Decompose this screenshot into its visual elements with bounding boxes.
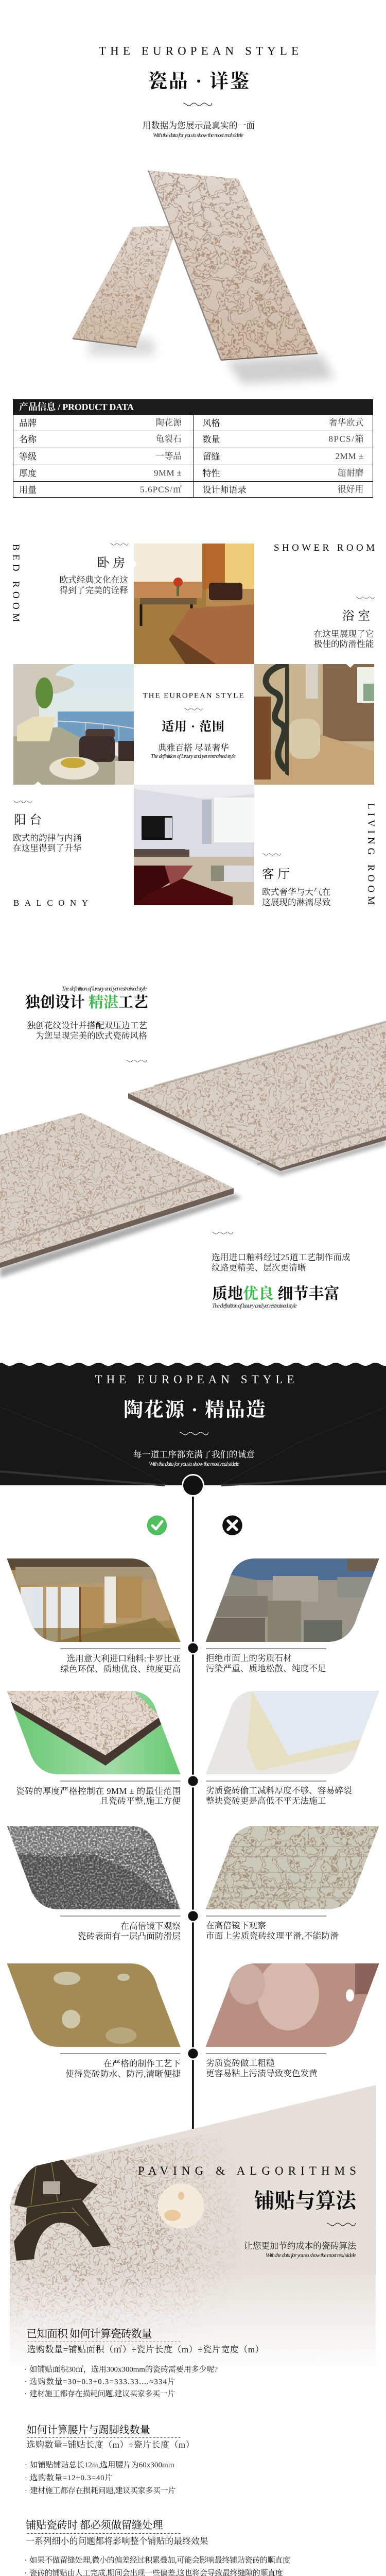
text: tile quantity calculation: 如铺贴面积30㎡，选用300x300mm的瓷砖需要用多少呢? bbox=[29, 2365, 218, 2374]
divider lines row 1 bbox=[60, 1648, 326, 1649]
text: row 4 bad: 更容易粘上污渍导致变色发黄 bbox=[206, 2069, 318, 2078]
text: row 3 bad bbox=[206, 1920, 339, 1941]
text: balcony bbox=[13, 801, 88, 908]
text: row 2 good bbox=[16, 1786, 181, 1806]
text: balcony: 在这里得到了升华 bbox=[13, 843, 82, 853]
text: row 4 good bbox=[65, 2059, 181, 2079]
text: row 3 good: 瓷砖表面有一层凸面防滑层 bbox=[78, 1931, 181, 1941]
table cells: 特性 bbox=[203, 469, 220, 478]
text: quality texture: The definition of luxury and yet restrained style bbox=[212, 1303, 297, 1309]
text: waist line calculation: 如何计算腰片与踢脚线数量 bbox=[27, 2424, 150, 2436]
text: quality texture bbox=[212, 1232, 350, 1309]
text: row 2 bad: 劣质瓷砖偷工减料厚度不够、容易碎裂 bbox=[206, 1786, 352, 1795]
text: unique design: 为您呈现完美的欧式瓷砖风格 bbox=[36, 1031, 147, 1041]
text: living room: 客厅 bbox=[262, 867, 293, 881]
photo: bedroom bbox=[134, 544, 254, 664]
text: application scope bbox=[143, 692, 244, 759]
table cells: 风格 bbox=[203, 418, 220, 428]
text: balcony: BALCONY bbox=[13, 898, 88, 908]
text: application scope: THE EUROPEAN STYLE bbox=[143, 692, 244, 700]
table cells: 龟裂石 bbox=[155, 434, 182, 444]
banner title: 陶花源 · 精品造 bbox=[124, 1399, 266, 1421]
subtitle: 用数据为您展示最真实的一面 bbox=[143, 121, 255, 131]
text: row 4 good: 在严格的制作工艺下 bbox=[103, 2059, 181, 2069]
text: row 1 good bbox=[60, 1654, 181, 1674]
text: application scope: 典雅百搭 尽显奢华 bbox=[158, 743, 229, 753]
text: bed room: 得到了完美的诠释 bbox=[60, 585, 128, 596]
text: shower room bbox=[274, 543, 375, 649]
text: paving heading: With the data for you to show the most real sidele bbox=[266, 2252, 356, 2259]
text: application scope: The definition of luxury and yet restrained style bbox=[151, 753, 236, 759]
product photo: tile edge detail bbox=[0, 1022, 386, 1278]
divider lines row 2 bbox=[60, 1781, 326, 1782]
photo: imported glaze warehouse bbox=[7, 1558, 181, 1642]
table cells bbox=[19, 418, 363, 495]
text: quality texture: 选用进口釉料经过25道工艺制作而成 bbox=[212, 1252, 350, 1262]
table cells: 陶花源 bbox=[155, 418, 182, 428]
table cells: 厚度 bbox=[19, 469, 37, 478]
text: row 4 bad bbox=[206, 2058, 318, 2078]
banner english subtitle: With the data for you to show the most real sidele bbox=[149, 1461, 239, 1467]
text: row 3 bad: 在高倍镜下观察 bbox=[206, 1920, 266, 1930]
text: tile quantity calculation: · bbox=[24, 2390, 27, 2398]
text: row 1 bad: 污染严重、质地松散、纯度不足 bbox=[206, 1664, 326, 1673]
text: row 2 good: 且瓷砖平整,施工方便 bbox=[100, 1796, 181, 1806]
photo: bathroom bbox=[254, 664, 374, 785]
table cells: 品牌 bbox=[19, 418, 37, 428]
text: unique design: 独创设计 精湛工艺 bbox=[25, 994, 148, 1011]
photo: anti-slip surface bbox=[0, 1826, 185, 1909]
text: living room bbox=[262, 803, 376, 907]
text: grout gap advice: 一系列细小的问题都将影响整个铺贴的最终效果 bbox=[26, 2536, 208, 2546]
text: grout gap advice bbox=[24, 2519, 305, 2576]
text: grout gap advice: · bbox=[24, 2556, 27, 2565]
text: shower room: 极佳的防滑性能 bbox=[314, 639, 374, 649]
table header bar bbox=[13, 399, 373, 415]
text: paving heading: PAVING & ALGORITHMS bbox=[138, 2164, 356, 2177]
table: product data bbox=[13, 399, 373, 498]
banner subtitle: 每一道工序都充满了我们的诚意 bbox=[133, 1450, 255, 1460]
text: living room: 这展现的淋漓尽致 bbox=[262, 897, 331, 907]
table cells: 设计师语录 bbox=[203, 484, 246, 495]
text: waist line calculation: 建材施工都存在损耗问题,建议买家多买一片 bbox=[30, 2486, 176, 2495]
table cells: 很好用 bbox=[338, 484, 363, 495]
text: waist line calculation: 选购数量=12÷0.3=40片 bbox=[30, 2473, 112, 2482]
title: porcelain details: 瓷品 · 详鉴 bbox=[148, 71, 249, 92]
table cells: 奢华欧式 bbox=[328, 418, 363, 428]
table cells: 8PCS/箱 bbox=[328, 434, 363, 444]
text: paving heading: 让您更加节约成本的瓷砖算法 bbox=[244, 2241, 356, 2251]
text: grout gap advice: 铺贴瓷砖时 都必须做留缝处理 bbox=[26, 2519, 163, 2531]
text: quality texture: 质地优良 细节丰富 bbox=[212, 1285, 340, 1302]
wave ornament bbox=[183, 103, 212, 106]
text: row 4 bad: 劣质瓷砖做工粗糙 bbox=[206, 2058, 275, 2068]
photo: thin low-grade tile bbox=[203, 1691, 381, 1774]
text: row 1 good: 绿色环保、质地优良、纯度更高 bbox=[60, 1664, 181, 1674]
marble texture bbox=[10, 2134, 242, 2352]
product photo: two leaning tiles bbox=[73, 171, 335, 384]
text: application scope: 适用 · 范围 bbox=[162, 720, 224, 734]
table cells: 数量 bbox=[203, 435, 220, 444]
text: unique design: 独创花纹设计并搭配双压边工艺 bbox=[27, 1021, 147, 1030]
text: waist line calculation bbox=[25, 2424, 195, 2495]
text: shower room: 在这里展现了它 bbox=[314, 629, 374, 639]
table cells: 2MM ± bbox=[336, 451, 363, 461]
text: waist line calculation: · bbox=[25, 2474, 27, 2482]
text: tile quantity calculation: · bbox=[24, 2378, 27, 2386]
text: row 1 bad: 拒绝市面上的劣质石材 bbox=[206, 1653, 292, 1663]
text: unique design bbox=[25, 986, 148, 1062]
photo: living room bbox=[134, 785, 254, 905]
table cells: 9MM ± bbox=[154, 468, 182, 478]
text: quality texture: 纹路更精美、层次更清晰 bbox=[212, 1263, 306, 1273]
text: bed room: 欧式经典文化在这 bbox=[60, 575, 128, 585]
text: row 4 good: 使得瓷砖防水、防污,清晰便捷 bbox=[65, 2069, 181, 2079]
photo: tile thickness bbox=[0, 1691, 185, 1774]
wave ornament bbox=[180, 1432, 208, 1435]
text: paving heading bbox=[138, 2164, 358, 2259]
text: tile quantity calculation: 建材施工都存在损耗问题,建议买家多买一片 bbox=[29, 2389, 175, 2398]
table cells: 名称 bbox=[19, 435, 37, 444]
text: row 3 good: 在高倍镜下观察 bbox=[120, 1921, 181, 1931]
text: paving heading: 铺贴与算法 bbox=[254, 2190, 358, 2212]
icon: cross mark bbox=[222, 1515, 242, 1535]
text: waist line calculation: 如铺贴铺贴总长12m,选用腰片为60x300mm bbox=[30, 2460, 174, 2469]
text: shower room: SHOWER ROOM bbox=[274, 543, 375, 553]
text: row 1 good: 选用意大利进口釉料:卡罗比亚 bbox=[66, 1654, 181, 1664]
table cells: 留缝 bbox=[203, 452, 220, 462]
photo: balcony bbox=[13, 664, 134, 785]
table cells: 等级 bbox=[19, 452, 37, 462]
text: living room: 欧式奢华与大气在 bbox=[262, 887, 330, 897]
photo: smooth low-grade surface bbox=[203, 1826, 381, 1909]
table cells: 超耐磨 bbox=[338, 468, 363, 478]
text: shower room: 浴室 bbox=[342, 609, 374, 623]
text: balcony: 阳台 bbox=[14, 813, 45, 827]
eiffel tower model bbox=[14, 2160, 111, 2261]
text: row 2 good: 瓷砖的厚度严格控制在 9MM ± 的最佳范围 bbox=[16, 1786, 181, 1796]
divider lines row 3 bbox=[60, 1916, 326, 1917]
text: bed room: 卧房 bbox=[97, 556, 129, 570]
text: tile quantity calculation bbox=[24, 2328, 264, 2398]
text: bed room bbox=[10, 544, 129, 622]
dark banner bbox=[0, 1363, 386, 1485]
icon: check mark bbox=[147, 1515, 167, 1535]
text: row 2 bad: 整块瓷砖更是高低不平无法施工 bbox=[206, 1796, 326, 1806]
text: row 3 bad: 市面上劣质瓷砖纹理平滑,不能防滑 bbox=[206, 1931, 339, 1941]
heading: the european style: THE EUROPEAN STYLE bbox=[99, 44, 299, 58]
text: tile quantity calculation: 选购数量=30÷0.3÷0.3=333.33....≈334片 bbox=[29, 2377, 175, 2386]
photo: waterproof surface bbox=[0, 1963, 185, 2047]
text: unique design: The definition of luxury and yet restrained style bbox=[62, 986, 147, 992]
text: grout gap advice: 如果不做留缝处理,微小的偏差经过积累叠加,可能会影响最终铺贴瓷砖的顺直度 bbox=[29, 2555, 290, 2565]
table cells: 用量 bbox=[19, 485, 37, 495]
text: waist line calculation: · bbox=[25, 2487, 27, 2495]
panel: paving and algorithms bbox=[10, 2085, 376, 2375]
notches on photos bbox=[34, 560, 354, 785]
text: tile quantity calculation: 选购数量=铺贴面积（㎡）÷瓷片长度（m）÷瓷片宽度（m） bbox=[27, 2345, 264, 2354]
text: living room: LIVING ROOM bbox=[365, 803, 376, 905]
photo: low-grade stone blocks bbox=[203, 1558, 381, 1642]
table header bar: 产品信息 / PRODUCT DATA bbox=[19, 401, 134, 412]
banner heading: THE EUROPEAN STYLE bbox=[95, 1373, 294, 1386]
text: bed room: BED ROOM bbox=[10, 544, 21, 622]
comparison timeline bbox=[182, 1475, 204, 2129]
text: row 2 bad bbox=[206, 1786, 352, 1806]
divider lines row 4 bbox=[60, 2053, 326, 2054]
text: waist line calculation: · bbox=[25, 2461, 27, 2469]
text: tile quantity calculation: 已知面积 如何计算瓷砖数量 bbox=[26, 2328, 152, 2340]
text: row 1 bad bbox=[206, 1653, 326, 1673]
header: product title block bbox=[99, 44, 299, 139]
text: tile quantity calculation: · bbox=[24, 2366, 27, 2374]
table cells: 5.6PCS/㎡ bbox=[140, 484, 182, 495]
photo: stained low-grade surface bbox=[203, 1958, 381, 2047]
shell bbox=[157, 2183, 204, 2229]
table cells: 一等品 bbox=[155, 451, 182, 461]
english subtitle: With the data for you to show the most real sidele bbox=[153, 132, 243, 139]
text: waist line calculation: 选购数量=铺贴长度（m）÷瓷片长度（m） bbox=[27, 2440, 195, 2450]
text: balcony: 欧式的韵律与内涵 bbox=[13, 833, 81, 843]
text: row 3 good bbox=[78, 1921, 181, 1941]
